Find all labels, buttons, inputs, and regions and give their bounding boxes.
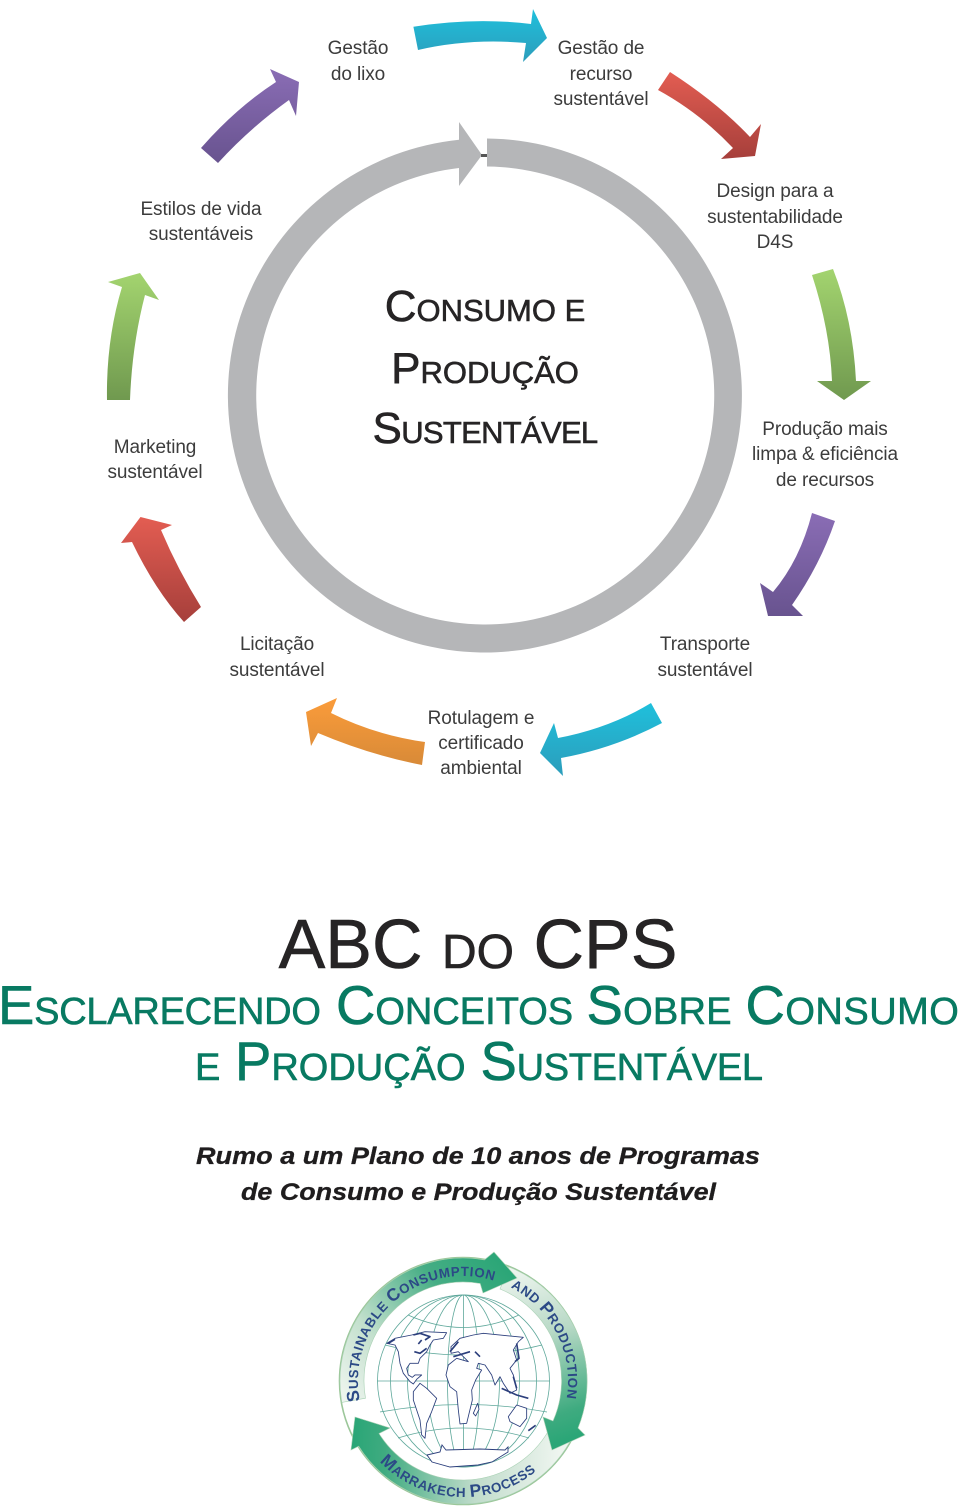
- label: Marketing sustentável: sustentável: [107, 462, 203, 483]
- label: Rotulagem e certificado ambiental: ambiental: [440, 758, 522, 779]
- label: Estilos de vida sustentáveis: sustentáveis: [149, 224, 253, 245]
- label: Gestão de recurso sustentável: sustentável: [553, 89, 649, 110]
- logo arrow: top left: [340, 1252, 517, 1402]
- arrow: purple lower right: [760, 513, 835, 616]
- label: Gestão de recurso sustentável: recurso: [570, 64, 632, 85]
- logo outer circle: [340, 1258, 586, 1504]
- label: Transporte sustentável: sustentável: [657, 660, 753, 681]
- arrow: purple upper left: [201, 69, 299, 163]
- subheading: PRODUÇÃO: [235, 1031, 466, 1092]
- subheading: SUSTENTÁVEL: [480, 1031, 763, 1092]
- subheading: CONCEITOS: [336, 975, 573, 1036]
- tagline: [196, 1143, 760, 1206]
- logo arrow: right: [500, 1267, 587, 1450]
- arrow: red top right: [658, 72, 761, 159]
- label: Design para a sustentabilidade D4S: D4S: [757, 232, 793, 253]
- label: Design para a sustentabilidade D4S: sustentabilidade: [707, 207, 843, 228]
- arrow: cyan bottom: [540, 703, 662, 776]
- arrow: orange bottom: [306, 698, 425, 765]
- logo: Marrakech Process: [338, 1252, 588, 1506]
- subheading: E: [195, 1047, 220, 1089]
- label: Transporte sustentável: Transporte: [660, 634, 750, 655]
- label: Licitação sustentável: Licitação: [240, 634, 314, 655]
- ring gap tick: [481, 154, 487, 157]
- subheading: [0, 975, 959, 1092]
- subheading: ESCLARECENDO: [0, 975, 321, 1036]
- subheading: SOBRE: [586, 975, 732, 1036]
- arrow: red left: [121, 517, 201, 622]
- label: Licitação sustentável: sustentável: [229, 660, 325, 681]
- logo continent: Antarctica: [427, 1445, 508, 1467]
- label: Rotulagem e certificado ambiental: Rotulagem e: [428, 708, 534, 729]
- label: Gestão do lixo: do lixo: [331, 64, 385, 85]
- label: Produção mais limpa: Produção mais: [762, 419, 888, 440]
- ring title: SUSTENTÁVEL: [373, 404, 598, 453]
- label: Rotulagem e certificado ambiental: certificado: [438, 733, 524, 754]
- tagline: Rumo a um Plano de 10 anos de Programas: [196, 1143, 760, 1170]
- label: Estilos de vida sustentáveis: Estilos de vida: [140, 199, 262, 220]
- arrow: green right: [812, 269, 871, 400]
- arrow: green left: [107, 273, 159, 400]
- subheading: CONSUMO: [746, 975, 959, 1036]
- logo continents: Eurasia, Africa, Australia: [446, 1333, 536, 1431]
- ring title: [373, 282, 598, 453]
- label: Produção mais limpa: de recursos: [776, 470, 874, 491]
- label: Gestão de recurso sustentável: Gestão de: [558, 38, 644, 59]
- ring title: CONSUMO E: [385, 282, 585, 331]
- arrow: cyan top: [413, 9, 547, 62]
- logo text: and Production: AND PRODUCTION: [511, 1281, 578, 1398]
- label: Produção mais limpa: limpa & eficiência: [752, 444, 899, 465]
- central grey ring arrow: [228, 122, 742, 652]
- logo globe: [377, 1295, 550, 1467]
- logo arrow: bottom: [351, 1417, 570, 1504]
- logo continents: Americas: [387, 1332, 447, 1438]
- logo text: Marrakech Process: MARRAKECH PROCESS: [380, 1454, 535, 1497]
- heading: ABC do CPS: ABC DO CPS: [279, 905, 677, 983]
- logo text: Sustainable Consumption: SUSTAINABLE CONSUMPTION: [346, 1266, 496, 1402]
- tagline: de Consumo e Produção Sustentável: [241, 1179, 717, 1206]
- ring title: PRODUÇÃO: [391, 344, 579, 393]
- label: Design para a sustentabilidade D4S: Design para a: [716, 181, 834, 202]
- label: Gestão do lixo: Gestão: [328, 38, 388, 59]
- label: Marketing sustentável: Marketing: [114, 437, 196, 458]
